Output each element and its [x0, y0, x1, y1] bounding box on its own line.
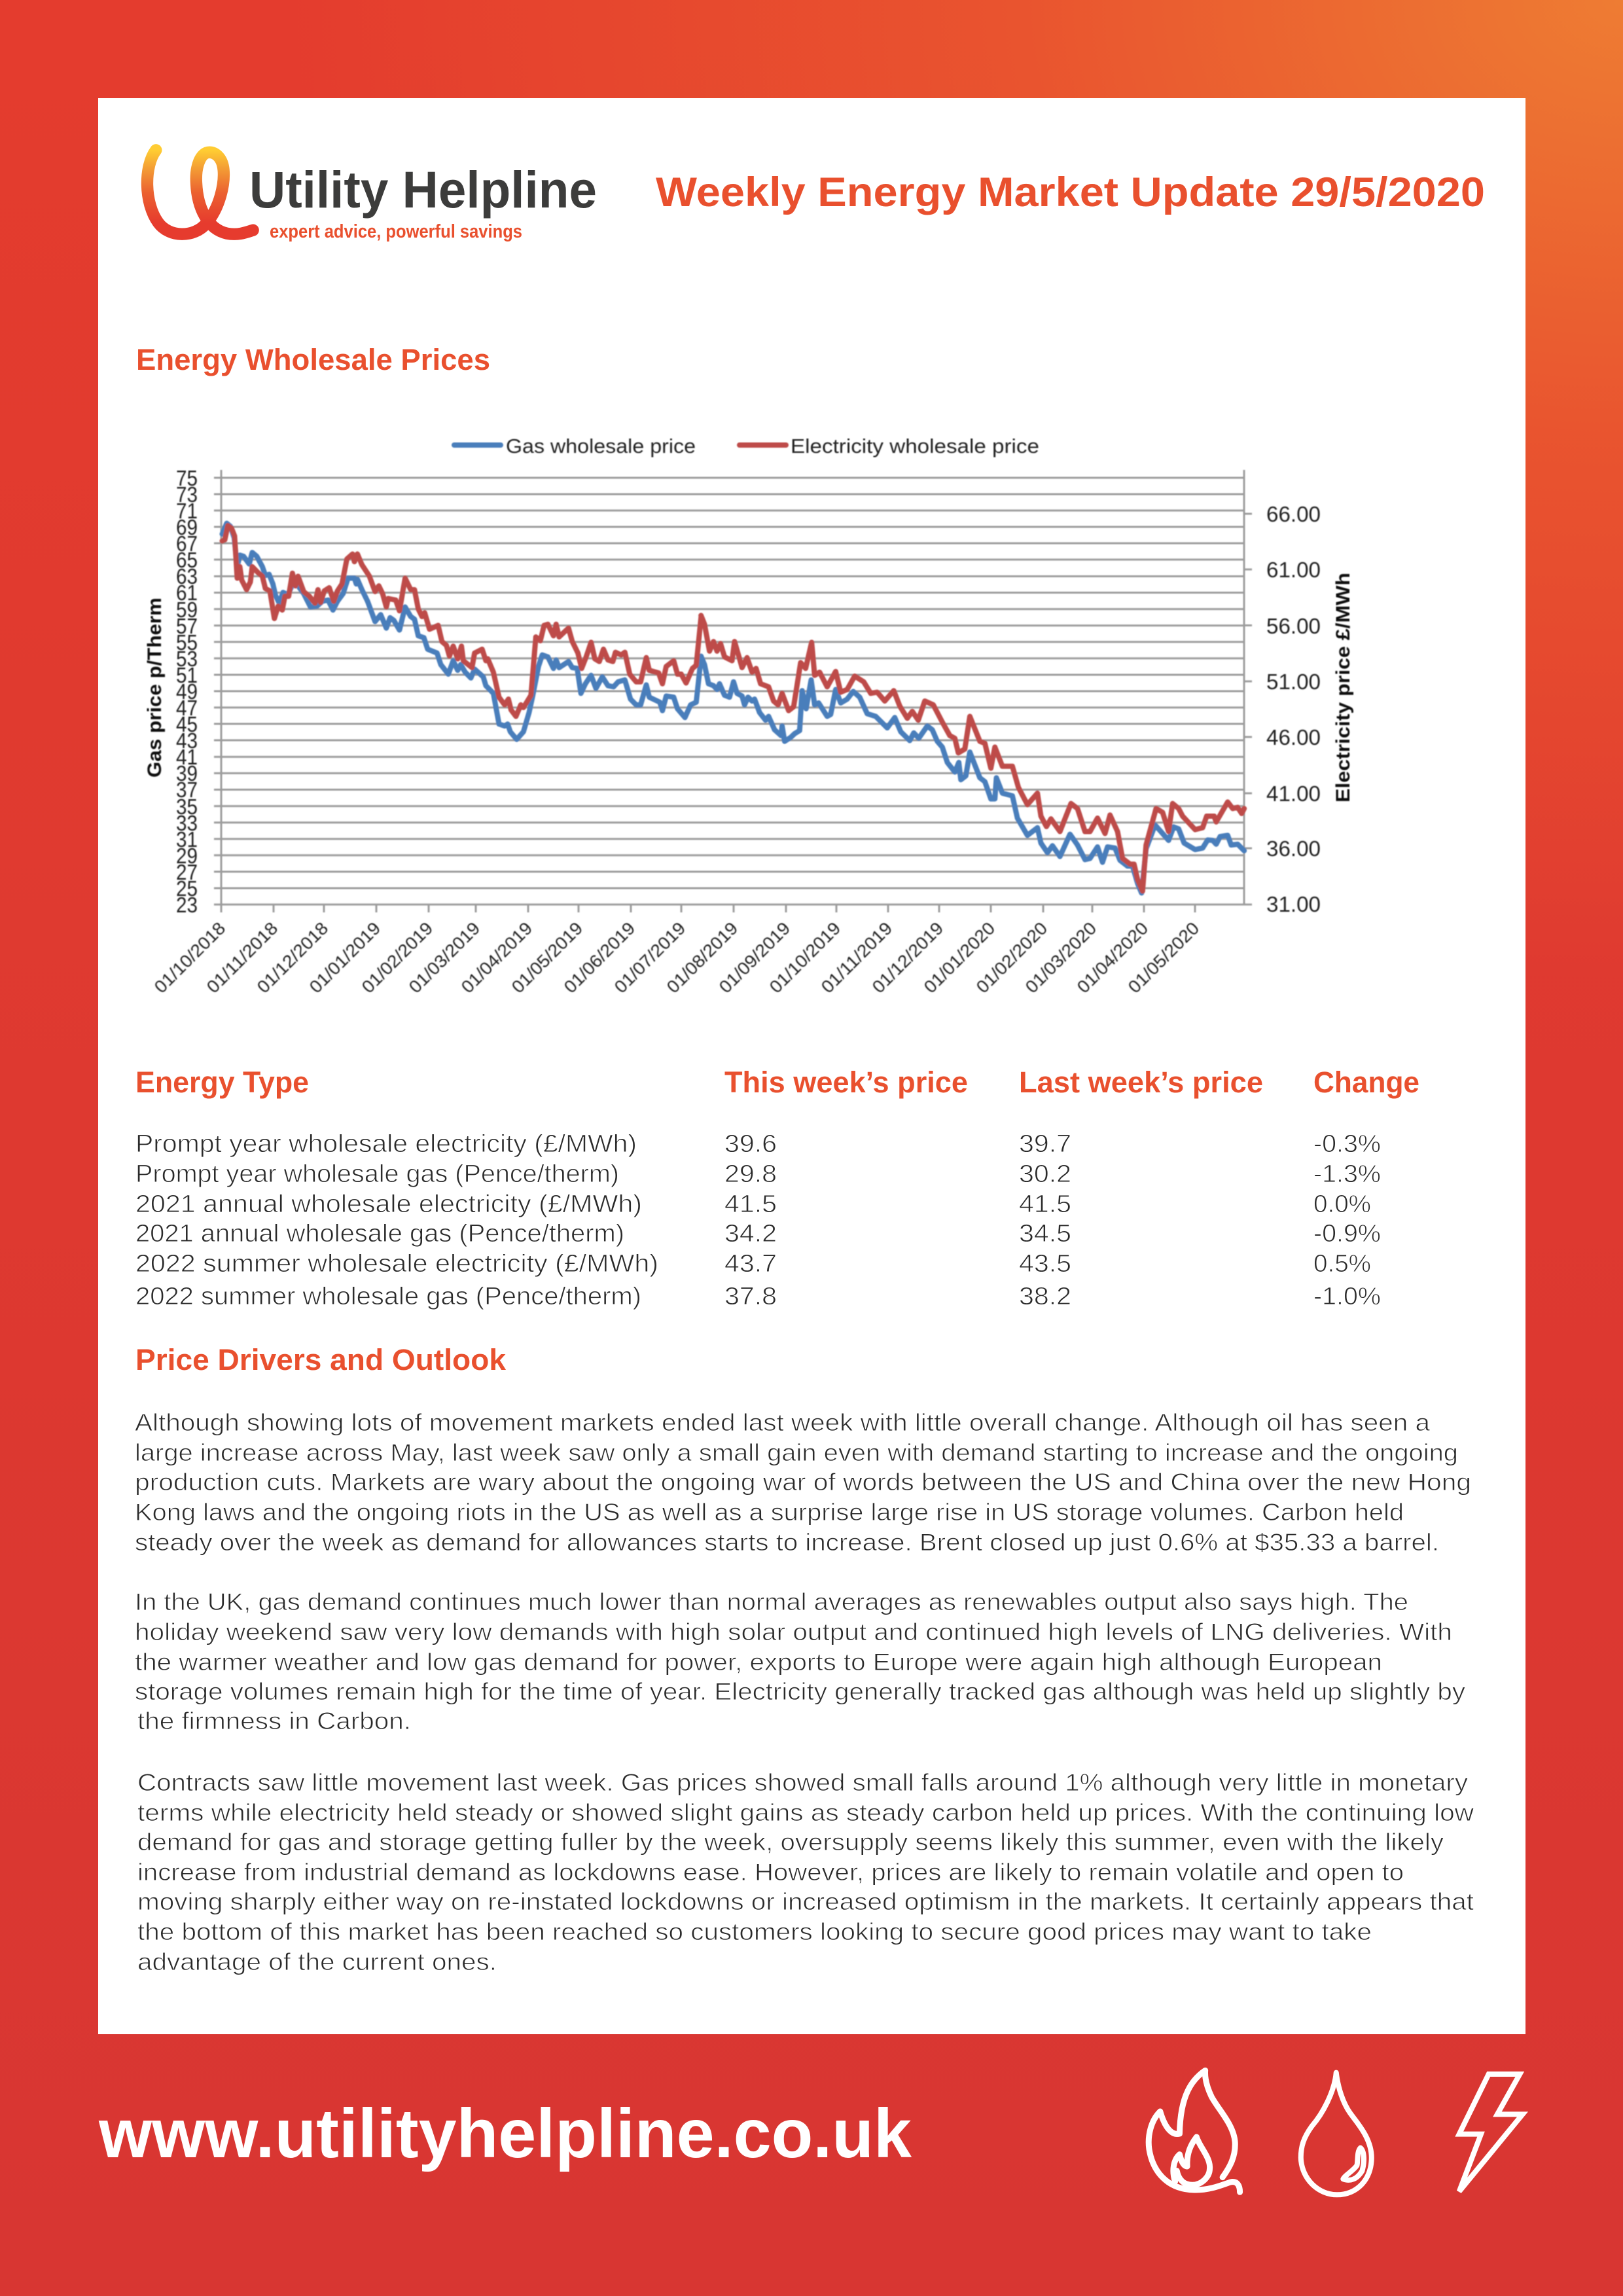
- paragraph: contracts outlook: terms while electricity held steady or showed slight gains as steady carbon held up prices. With the continuing low: [137, 1799, 1474, 1826]
- gas price line: [222, 524, 1244, 893]
- table row: 2021 gas: -0.9%: [1313, 1220, 1381, 1247]
- left axis labels: 55: [176, 630, 198, 655]
- left axis labels: 49: [176, 679, 198, 704]
- chart legend: [454, 435, 1039, 457]
- left axis labels: 25: [176, 876, 198, 901]
- table row: prompt year gas: 30.2: [1019, 1160, 1071, 1188]
- x axis date labels: 01/11/2018: [203, 918, 281, 997]
- x axis date labels: 01/12/2018: [253, 918, 332, 997]
- table header row: This week’s price: [724, 1066, 968, 1099]
- left axis labels: 45: [176, 712, 198, 736]
- price table: [135, 1066, 1419, 1310]
- left axis labels: 73: [176, 482, 198, 507]
- table row: 2021 electricity: 2021 annual wholesale electricity (£/MWh): [135, 1191, 642, 1218]
- table row: 2021 gas: [135, 1220, 1381, 1247]
- x axis date labels: 01/01/2020: [920, 918, 999, 997]
- left axis labels: 67: [176, 531, 198, 556]
- icon: flame: [1149, 2070, 1240, 2192]
- chart legend: Gas wholesale price: [506, 435, 696, 457]
- right axis labels: 61.00: [1266, 558, 1321, 582]
- left axis labels: 43: [176, 728, 198, 753]
- heading: price drivers and outlook: Price Drivers and Outlook: [135, 1343, 507, 1376]
- table row: 2021 electricity: 41.5: [724, 1191, 777, 1218]
- left axis labels: 27: [176, 860, 198, 884]
- x axis date labels: 01/02/2020: [972, 918, 1051, 997]
- left axis labels: 61: [176, 581, 198, 605]
- left axis labels: 65: [176, 548, 198, 572]
- x axis date labels: 01/04/2019: [457, 918, 536, 997]
- left axis labels: 41: [176, 745, 198, 769]
- right axis labels: 36.00: [1266, 836, 1321, 861]
- table row: 2021 electricity: [135, 1191, 1371, 1218]
- table row: prompt year gas: 29.8: [724, 1160, 777, 1188]
- table row: 2022 gas: 38.2: [1019, 1283, 1071, 1310]
- x axis date labels: 01/08/2019: [663, 918, 741, 997]
- table row: 2022 electricity: [135, 1250, 1371, 1278]
- table row: prompt year electricity: -0.3%: [1313, 1130, 1381, 1158]
- table row: prompt year electricity: [135, 1130, 1381, 1158]
- x axis date labels: 01/04/2020: [1073, 918, 1152, 997]
- table row: prompt year gas: [135, 1160, 1381, 1188]
- logo wordmark: Utility Helpline: [249, 160, 597, 219]
- left axis labels: [176, 466, 198, 917]
- left axis labels: 63: [176, 564, 198, 588]
- left axis labels: 71: [176, 499, 198, 523]
- left axis labels: 23: [176, 893, 198, 917]
- left axis labels: 33: [176, 811, 198, 835]
- logo: [147, 150, 597, 242]
- x axis date labels: 01/09/2019: [715, 918, 794, 997]
- table row: prompt year gas: Prompt year wholesale gas (Pence/therm): [135, 1160, 619, 1188]
- right axis labels: 66.00: [1266, 502, 1321, 526]
- right axis labels: 41.00: [1266, 781, 1321, 806]
- table header row: [135, 1066, 1419, 1099]
- table row: 2022 electricity: 0.5%: [1313, 1250, 1371, 1278]
- paragraph: contracts outlook: the bottom of this market has been reached so customers looking to secure good prices may want to take: [137, 1918, 1372, 1945]
- paragraph: contracts outlook: Contracts saw little movement last week. Gas prices showed small falls around 1% although very little in monetary: [137, 1769, 1469, 1796]
- icon: logo swirl: [147, 150, 253, 234]
- right axis labels: 46.00: [1266, 725, 1321, 749]
- paragraph: UK demand: holiday weekend saw very low demands with high solar output and continued high levels of LNG deliveries. With: [135, 1619, 1452, 1645]
- left axis labels: 47: [176, 696, 198, 720]
- x axis date labels: 01/12/2019: [868, 918, 947, 997]
- table header row: Energy Type: [135, 1066, 309, 1099]
- table row: prompt year gas: -1.3%: [1313, 1160, 1381, 1188]
- electricity price line: [222, 526, 1244, 891]
- table row: 2022 gas: [135, 1283, 1381, 1310]
- paragraph: contracts outlook: increase from industrial demand as lockdowns ease. However, prices are likely to remain volatile and open to: [137, 1859, 1404, 1886]
- paragraph: UK demand: storage volumes remain high for the time of year. Electricity generally tracked gas although was held up slightly by: [135, 1678, 1466, 1705]
- table row: 2022 gas: -1.0%: [1313, 1283, 1381, 1310]
- paragraph: UK demand: In the UK, gas demand continues much lower than normal averages as renewables output also says high. The: [135, 1588, 1408, 1615]
- table row: 2021 electricity: 0.0%: [1313, 1191, 1371, 1218]
- table row: prompt year electricity: 39.7: [1019, 1130, 1071, 1158]
- right axis labels: 31.00: [1266, 892, 1321, 916]
- right axis labels: 51.00: [1266, 670, 1321, 694]
- icon: lightning bolt: [1459, 2074, 1523, 2191]
- table row: 2021 gas: 34.5: [1019, 1220, 1071, 1247]
- table row: 2021 electricity: 41.5: [1019, 1191, 1071, 1218]
- left axis labels: 57: [176, 614, 198, 638]
- left axis labels: 75: [176, 466, 198, 490]
- left axis title: Gas price p/Therm: [144, 598, 166, 778]
- right axis labels: 56.00: [1266, 614, 1321, 638]
- table row: 2021 gas: 2021 annual wholesale gas (Pence/therm): [135, 1220, 624, 1247]
- x axis date labels: 01/10/2019: [766, 918, 844, 997]
- icon: water drop: [1301, 2073, 1372, 2195]
- title: Weekly Energy Market Update 29/5/2020: [656, 170, 1485, 215]
- footer website url: www.utilityhelpline.co.uk: [98, 2095, 912, 2172]
- left axis labels: 31: [176, 827, 198, 852]
- logo tagline: expert advice, powerful savings: [270, 221, 522, 242]
- paragraph: market overview: steady over the week as demand for allowances starts to increase. Brent closed up just 0.6% at $35.33 a barrel.: [135, 1529, 1439, 1556]
- x axis date labels: 01/07/2019: [611, 918, 689, 997]
- line chart: gas and electricity wholesale prices: [144, 435, 1354, 997]
- table row: 2022 electricity: 2022 summer wholesale electricity (£/MWh): [135, 1250, 658, 1278]
- left axis labels: 69: [176, 515, 198, 539]
- paragraph: contracts outlook: advantage of the current ones.: [137, 1948, 497, 1975]
- left axis labels: 51: [176, 663, 198, 687]
- x axis date labels: 01/10/2018: [151, 918, 229, 997]
- left axis labels: 29: [176, 844, 198, 868]
- paragraph: market overview: Although showing lots of movement markets ended last week with little overall change. Although oil has seen a: [135, 1409, 1430, 1436]
- x axis date labels: 01/05/2020: [1124, 918, 1203, 997]
- paragraph: market overview: [135, 1409, 1471, 1556]
- paragraph: contracts outlook: [137, 1769, 1474, 1975]
- table row: 2022 gas: 37.8: [724, 1283, 777, 1310]
- paragraph: UK demand: the firmness in Carbon.: [137, 1708, 411, 1734]
- x axis date labels: 01/03/2019: [405, 918, 484, 997]
- left axis labels: 37: [176, 778, 198, 802]
- white content panel: [98, 98, 1525, 2034]
- paragraph: contracts outlook: moving sharply either way on re-instated lockdowns or increased optimism in the markets. It certainly appears that: [137, 1888, 1474, 1915]
- left axis labels: 59: [176, 598, 198, 622]
- table row: prompt year electricity: Prompt year wholesale electricity (£/MWh): [135, 1130, 637, 1158]
- paragraph: market overview: large increase across May, last week saw only a small gain even with demand starting to increase and the ongoing: [135, 1439, 1458, 1466]
- table row: 2022 gas: 2022 summer wholesale gas (Pence/therm): [135, 1283, 641, 1310]
- chart legend: Electricity wholesale price: [791, 435, 1039, 457]
- paragraph: market overview: production cuts. Markets are wary about the ongoing war of words between the US and China over the new Hong: [135, 1469, 1471, 1496]
- x axis date labels: [151, 918, 1203, 997]
- table header row: Last week’s price: [1019, 1066, 1263, 1099]
- x axis date labels: 01/06/2019: [560, 918, 639, 997]
- table header row: Change: [1313, 1066, 1419, 1099]
- table row: 2021 gas: 34.2: [724, 1220, 777, 1247]
- left axis labels: 35: [176, 795, 198, 819]
- paragraph: UK demand: the warmer weather and low gas demand for power, exports to Europe were again high although European: [135, 1649, 1382, 1676]
- x axis date labels: 01/11/2019: [817, 918, 896, 997]
- heading: energy wholesale prices: Energy Wholesale Prices: [136, 343, 490, 376]
- paragraph: contracts outlook: demand for gas and storage getting fuller by the week, oversupply seems likely this summer, even with the likely: [137, 1829, 1444, 1856]
- table row: 2022 electricity: 43.7: [724, 1250, 777, 1278]
- x axis date labels: 01/05/2019: [508, 918, 586, 997]
- right axis labels: [1266, 502, 1321, 916]
- left axis labels: 53: [176, 647, 198, 671]
- x axis date labels: 01/02/2019: [358, 918, 437, 997]
- x axis date labels: 01/03/2020: [1022, 918, 1100, 997]
- right axis title: Electricity price £/MWh: [1332, 573, 1354, 802]
- paragraph: market overview: Kong laws and the ongoing riots in the US as well as a surprise large rise in US storage volumes. Carbon held: [135, 1499, 1404, 1526]
- table row: prompt year electricity: 39.6: [724, 1130, 777, 1158]
- x axis date labels: 01/01/2019: [306, 918, 384, 997]
- table row: 2022 electricity: 43.5: [1019, 1250, 1071, 1278]
- left axis labels: 39: [176, 761, 198, 785]
- paragraph: UK demand: [135, 1588, 1466, 1734]
